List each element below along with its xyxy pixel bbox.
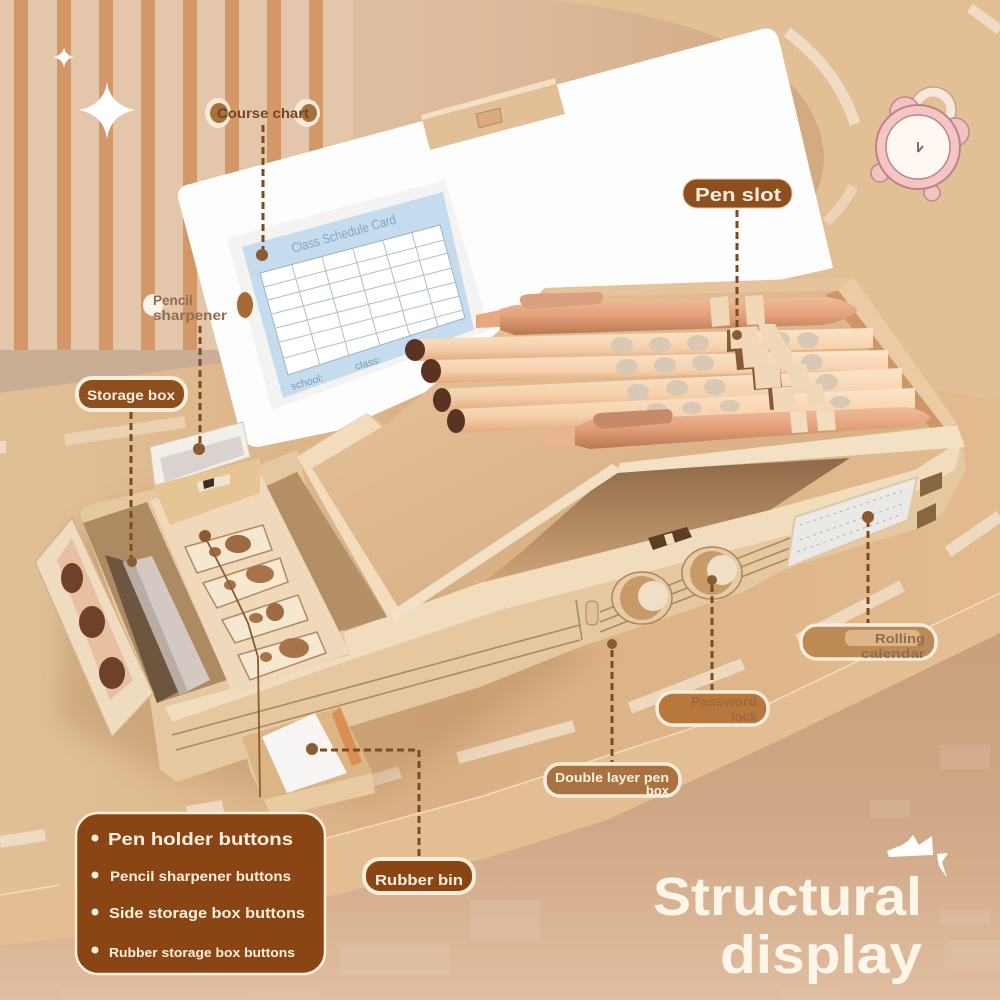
pen holder leader bbox=[205, 537, 260, 797]
schedule card title: Class Schedule Card bbox=[290, 212, 398, 256]
label: rolling calendar: calendar bbox=[861, 646, 925, 661]
label: double layer pen box: box bbox=[646, 783, 670, 798]
label: rubber bin: Rubber bin bbox=[375, 873, 463, 889]
rolling calendar bbox=[787, 472, 942, 568]
label: course chart: Course chart bbox=[217, 106, 310, 121]
label: password lock: Password bbox=[691, 694, 757, 709]
top pen rings bbox=[710, 295, 765, 327]
label: password lock bbox=[657, 692, 768, 725]
schedule class label: class: bbox=[354, 354, 383, 373]
schedule grid bbox=[260, 225, 465, 375]
label: double layer pen box bbox=[545, 764, 680, 798]
icon: sparkles bbox=[53, 47, 135, 139]
white lid with schedule bbox=[178, 28, 833, 447]
button 2 bbox=[203, 558, 288, 608]
pens bbox=[405, 292, 931, 449]
pale pen 2 bbox=[421, 350, 888, 383]
tray side flange bbox=[297, 413, 400, 618]
grip dents bbox=[611, 332, 850, 415]
pen tray plate bbox=[297, 277, 957, 617]
panel: button legend bbox=[76, 813, 325, 974]
side door bbox=[35, 518, 153, 737]
pale pen 3 bbox=[433, 368, 902, 412]
label: password lock: lock bbox=[731, 709, 758, 724]
label: rolling calendar: Rolling bbox=[875, 631, 925, 646]
schedule stamp backing bbox=[227, 180, 490, 410]
legend item: pencil sharpener buttons: Pencil sharpener buttons bbox=[110, 869, 291, 884]
button 1 bbox=[185, 525, 272, 573]
pencil case body bbox=[80, 440, 966, 782]
label: course chart bbox=[205, 98, 320, 128]
side storage box bbox=[35, 502, 227, 737]
calendar slots bbox=[917, 472, 942, 529]
button 4 bbox=[238, 632, 326, 680]
label: pencil sharpener bbox=[143, 290, 256, 323]
leader dots bbox=[127, 249, 874, 755]
label: pen slot: Pen slot bbox=[695, 184, 781, 205]
pale pen 4 bbox=[447, 388, 915, 433]
icon: alarm clock bbox=[871, 87, 969, 201]
inner compartment bbox=[262, 472, 387, 632]
label: pencil sharpener: sharpener bbox=[153, 308, 228, 323]
orange pen top bbox=[476, 292, 858, 335]
schedule card bbox=[242, 192, 474, 398]
legend item: side storage box buttons: Side storage box buttons bbox=[109, 906, 305, 922]
orange pen bottom bbox=[545, 407, 931, 449]
bar seams bbox=[172, 538, 790, 750]
lid gap shadow bbox=[480, 458, 850, 585]
label: rolling calendar bbox=[801, 625, 936, 661]
legend item: pen holder buttons: Pen holder buttons bbox=[108, 829, 293, 849]
label: pencil sharpener: Pencil bbox=[153, 293, 193, 308]
label: rubber bin bbox=[364, 859, 474, 893]
storage insert bbox=[123, 556, 210, 695]
password lock dials bbox=[586, 547, 742, 625]
rubber drawer bbox=[242, 707, 375, 818]
front bar top surface bbox=[165, 440, 962, 722]
leader lines bbox=[131, 125, 868, 858]
legend item: rubber storage box buttons: Rubber storage box buttons bbox=[109, 945, 295, 960]
tray left flange bbox=[390, 464, 622, 622]
title: structural display: display bbox=[720, 925, 922, 985]
label: pen slot bbox=[683, 179, 792, 208]
tray front flange bbox=[617, 425, 965, 473]
title: structural display: Structural bbox=[653, 867, 922, 927]
button 3 bbox=[222, 595, 308, 643]
schedule school label: school: bbox=[290, 372, 325, 393]
lid latch tab bbox=[421, 78, 565, 150]
icon: crown bbox=[887, 835, 948, 878]
stepped pen clips bbox=[727, 324, 826, 410]
pencil sharpener block bbox=[150, 422, 260, 525]
lock slider window bbox=[648, 527, 692, 550]
pale pen 1 bbox=[405, 328, 873, 361]
label: storage box: Storage box bbox=[87, 387, 175, 403]
button deck bbox=[150, 473, 350, 695]
title: structural display bbox=[653, 867, 922, 985]
label: double layer pen box: Double layer pen bbox=[555, 770, 669, 785]
label: storage box bbox=[77, 378, 186, 410]
